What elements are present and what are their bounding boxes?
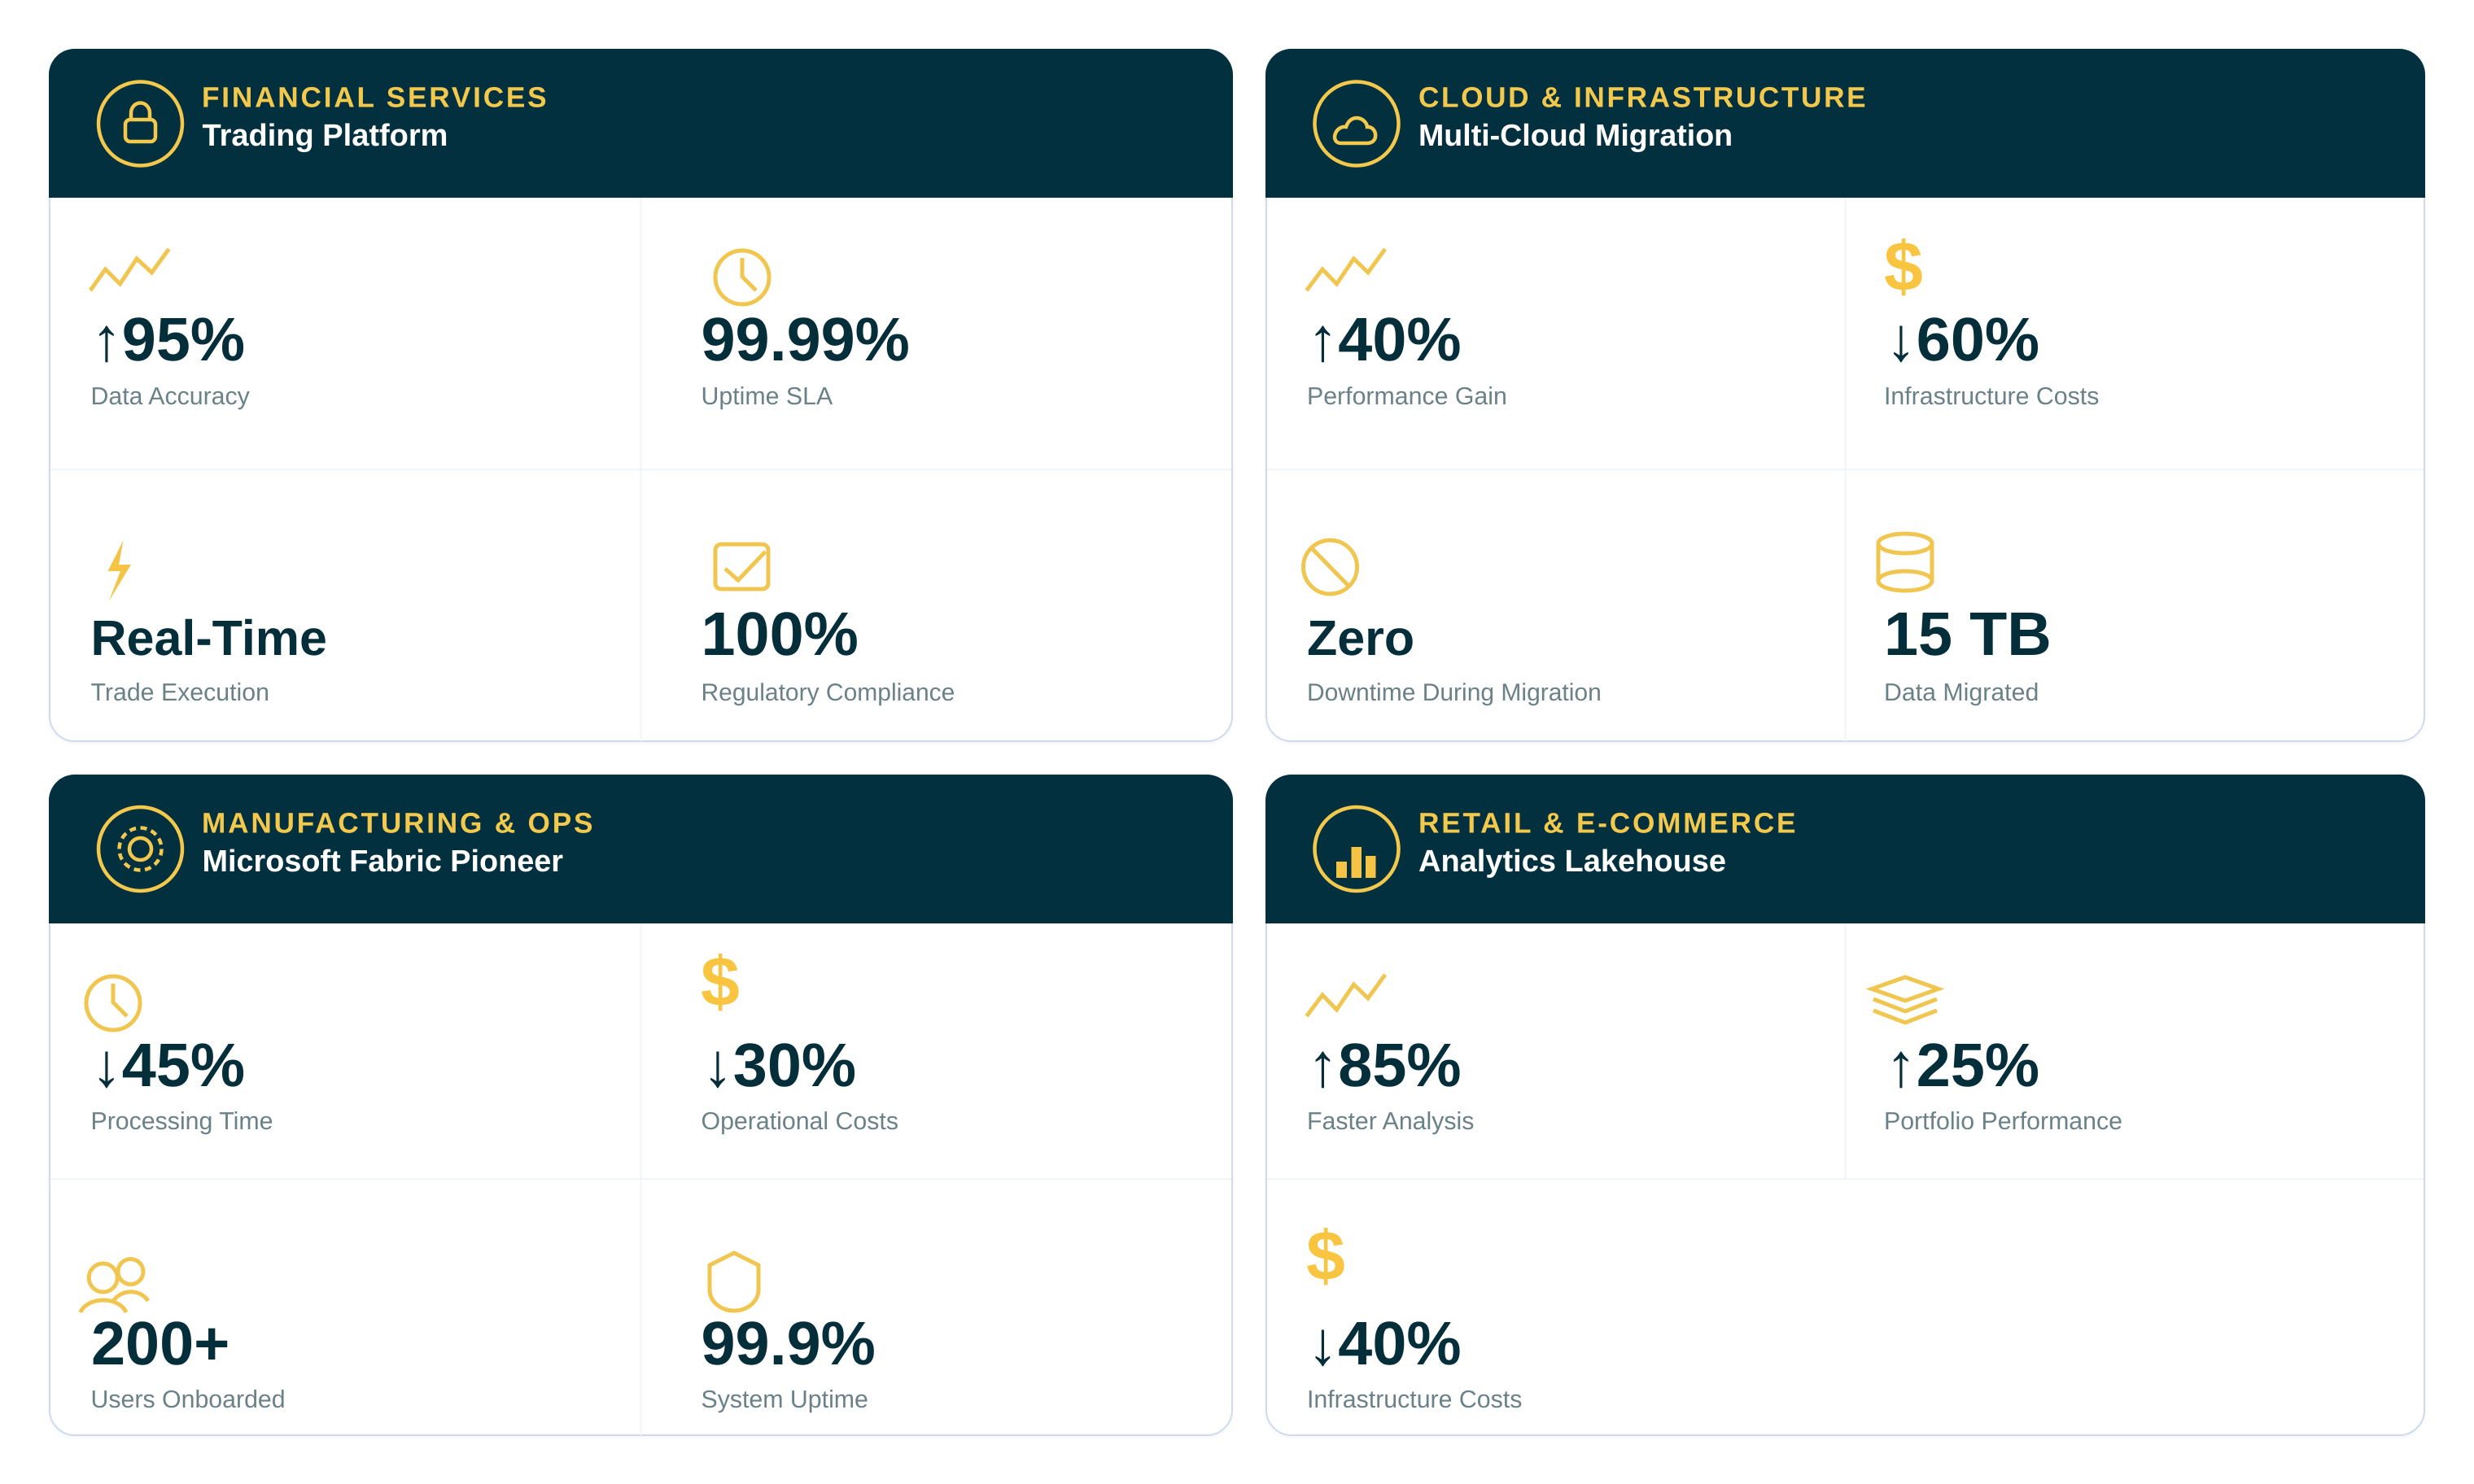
metric: infrastructure costs: $: [1884, 228, 1923, 306]
metric: downtime during migration: [1304, 540, 1602, 706]
metric: trade execution: [91, 540, 327, 706]
header: retail and e-commerce: [1265, 775, 2425, 923]
icon: bar chart: [1315, 807, 1398, 891]
panel: cloud and infrastructure: [1265, 49, 2425, 741]
metric: performance gain: [1307, 249, 1507, 410]
metric: users onboarded: Users Onboarded: [91, 1386, 286, 1413]
header: cloud and infrastructure: [1265, 49, 2425, 198]
subheading: trading platform: Trading Platform: [202, 119, 448, 153]
metric: infrastructure costs: $: [1306, 1217, 1345, 1295]
metric: trade execution: Trade Execution: [91, 679, 269, 706]
metric: uptime sla: 99.99%: [702, 306, 910, 374]
metric: data accuracy: Data Accuracy: [91, 383, 251, 410]
metric: users onboarded: 200+: [91, 1310, 229, 1378]
metric: infrastructure costs: [1306, 1217, 1522, 1413]
metric: infrastructure costs: Infrastructure Costs: [1307, 1386, 1522, 1413]
heading: cloud and infrastructure: CLOUD & INFRASTRUCTURE: [1418, 81, 1868, 114]
metric: downtime during migration: Zero: [1307, 610, 1414, 666]
metric: infrastructure costs: Infrastructure Costs: [1884, 383, 2099, 410]
metric: processing time: ↓45%: [91, 1032, 245, 1100]
metric: data migrated: [1878, 534, 2052, 706]
metric: infrastructure costs: [1884, 228, 2099, 410]
metric: data accuracy: [90, 249, 251, 410]
metric: regulatory compliance: 100%: [702, 600, 859, 669]
header: manufacturing and ops: [49, 775, 1233, 923]
metric: data migrated: 15 TB: [1884, 600, 2052, 669]
metric: portfolio performance: Portfolio Performance: [1884, 1108, 2122, 1135]
subheading: microsoft fabric pioneer: Microsoft Fabric Pioneer: [202, 845, 563, 879]
heading: financial services: FINANCIAL SERVICES: [202, 81, 549, 114]
metric: operational costs: ↓30%: [702, 1032, 856, 1100]
subheading: analytics lakehouse: Analytics Lakehouse: [1418, 845, 1726, 879]
subheading: multi-cloud migration: Multi-Cloud Migration: [1418, 118, 1733, 152]
panel: manufacturing and ops: [49, 775, 1233, 1435]
heading: manufacturing and ops: MANUFACTURING & OPS: [202, 807, 595, 840]
icon: lock: [98, 81, 182, 166]
metric: system uptime: 99.9%: [702, 1310, 876, 1378]
metric: processing time: Processing Time: [91, 1108, 273, 1135]
metric: system uptime: System Uptime: [702, 1386, 868, 1413]
metric: portfolio performance: [1872, 977, 2122, 1135]
metric: trade execution: Real-Time: [91, 610, 327, 666]
metric: downtime during migration: Downtime During Migration: [1307, 679, 1602, 706]
panel: retail and e-commerce: [1265, 775, 2425, 1435]
metric: infrastructure costs: ↓40%: [1307, 1310, 1462, 1378]
metric: faster analysis: Faster Analysis: [1307, 1108, 1474, 1135]
metric: infrastructure costs: ↓60%: [1886, 306, 2039, 374]
metric: system uptime: [702, 1253, 876, 1413]
metric: uptime sla: Uptime SLA: [702, 383, 833, 410]
metric: performance gain: Performance Gain: [1307, 383, 1507, 410]
metric: uptime sla: [702, 251, 910, 410]
metric: users onboarded: [81, 1259, 286, 1413]
icon: gear: [98, 807, 182, 891]
metric: data accuracy: ↑95%: [91, 306, 245, 374]
metric: performance gain: ↑40%: [1307, 306, 1462, 374]
panel: financial services: [49, 49, 1233, 741]
metric: regulatory compliance: Regulatory Compliance: [702, 679, 955, 706]
heading: retail and e-commerce: RETAIL & E-COMMERCE: [1418, 807, 1798, 840]
metric: operational costs: $: [701, 943, 740, 1021]
icon: cloud: [1315, 81, 1398, 166]
metric: regulatory compliance: [702, 544, 955, 706]
metric: data migrated: Data Migrated: [1884, 679, 2039, 706]
metric: faster analysis: [1307, 975, 1474, 1135]
metric: portfolio performance: ↑25%: [1886, 1032, 2039, 1100]
metric: operational costs: Operational Costs: [702, 1108, 898, 1135]
metric: faster analysis: ↑85%: [1307, 1032, 1462, 1100]
metric: operational costs: [701, 943, 898, 1135]
header: financial services: [49, 49, 1233, 198]
metric: processing time: [86, 976, 273, 1135]
